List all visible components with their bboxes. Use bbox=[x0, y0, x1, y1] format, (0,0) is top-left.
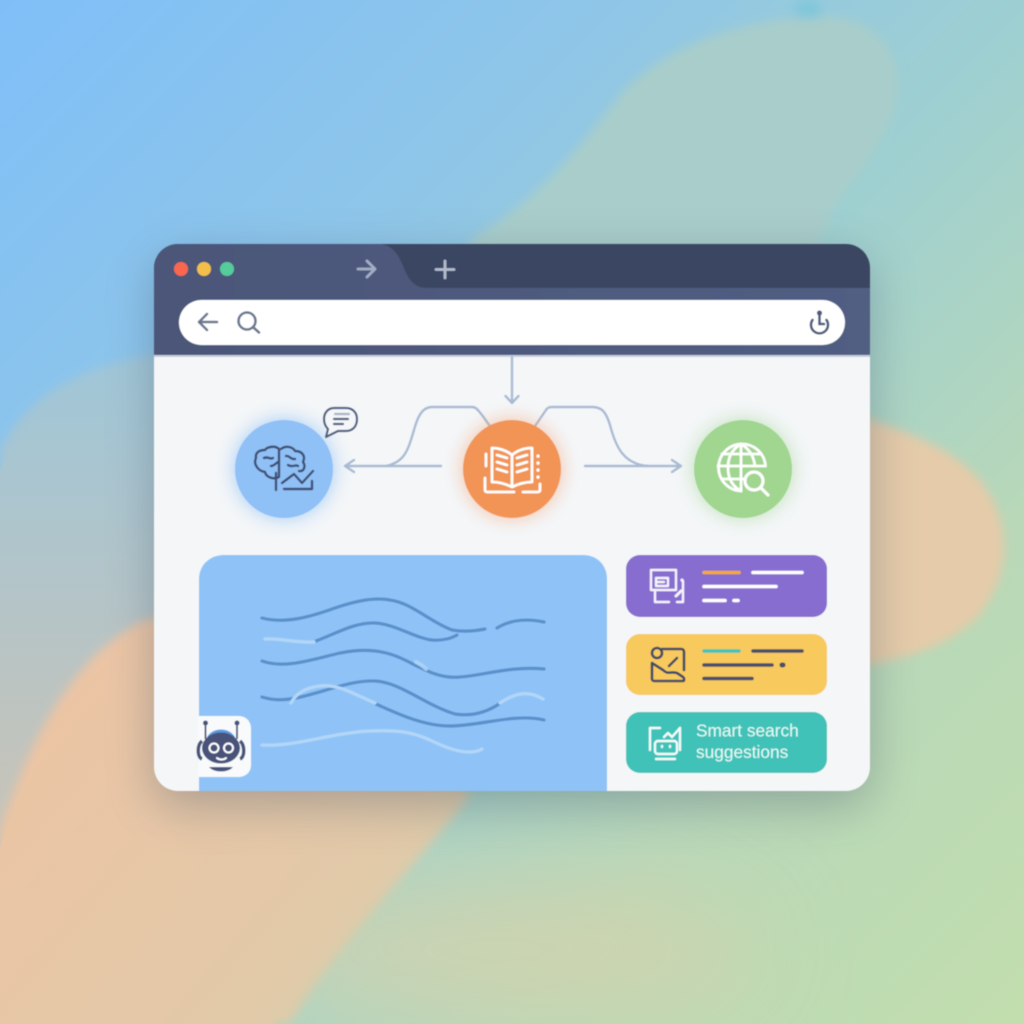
node: globe search bbox=[691, 417, 795, 521]
icon: document tool bbox=[651, 570, 683, 602]
card lines bbox=[704, 651, 802, 678]
robot avatar tile bbox=[198, 716, 251, 777]
icon: book bbox=[485, 448, 540, 492]
icon: chat bubble bbox=[324, 408, 357, 437]
icon: robot chart bbox=[650, 728, 680, 759]
flow connectors bbox=[345, 357, 681, 472]
icon: forward arrow bbox=[358, 261, 375, 277]
icon: robot bbox=[198, 720, 244, 772]
window content background bbox=[154, 350, 870, 791]
icon: search bbox=[238, 312, 259, 332]
card: yellow bbox=[626, 634, 827, 695]
label: Smart search bbox=[696, 720, 799, 740]
arrow: book to brain bbox=[345, 460, 441, 472]
window controls bbox=[174, 262, 234, 276]
connector: right curve bbox=[533, 407, 648, 466]
icon: brain with chart bbox=[255, 447, 313, 490]
active tab and toolbar bbox=[154, 244, 870, 356]
browser window bbox=[154, 244, 870, 791]
arrow: book to globe bbox=[585, 460, 681, 472]
arrow: down into book bbox=[506, 357, 518, 403]
card lines bbox=[704, 572, 802, 600]
icon: reload timer bbox=[811, 312, 828, 333]
address bar bbox=[179, 300, 845, 345]
node: brain analytics bbox=[232, 417, 336, 521]
card: purple bbox=[626, 555, 827, 617]
icon: globe with magnifier bbox=[718, 444, 768, 495]
panel: chat content bbox=[199, 555, 607, 791]
node: open book bbox=[460, 417, 564, 521]
label: suggestions bbox=[696, 742, 789, 762]
icon: back arrow bbox=[199, 314, 217, 330]
text wave lines bbox=[262, 599, 544, 752]
tab bar bbox=[154, 244, 870, 294]
connector: left curve bbox=[386, 407, 492, 466]
icon: new tab plus bbox=[436, 261, 454, 278]
toolbar bottom edge bbox=[154, 355, 870, 357]
browser window shadow bbox=[154, 258, 870, 805]
icon: image edit bbox=[652, 648, 684, 681]
card: teal smart search suggestions bbox=[626, 712, 827, 773]
